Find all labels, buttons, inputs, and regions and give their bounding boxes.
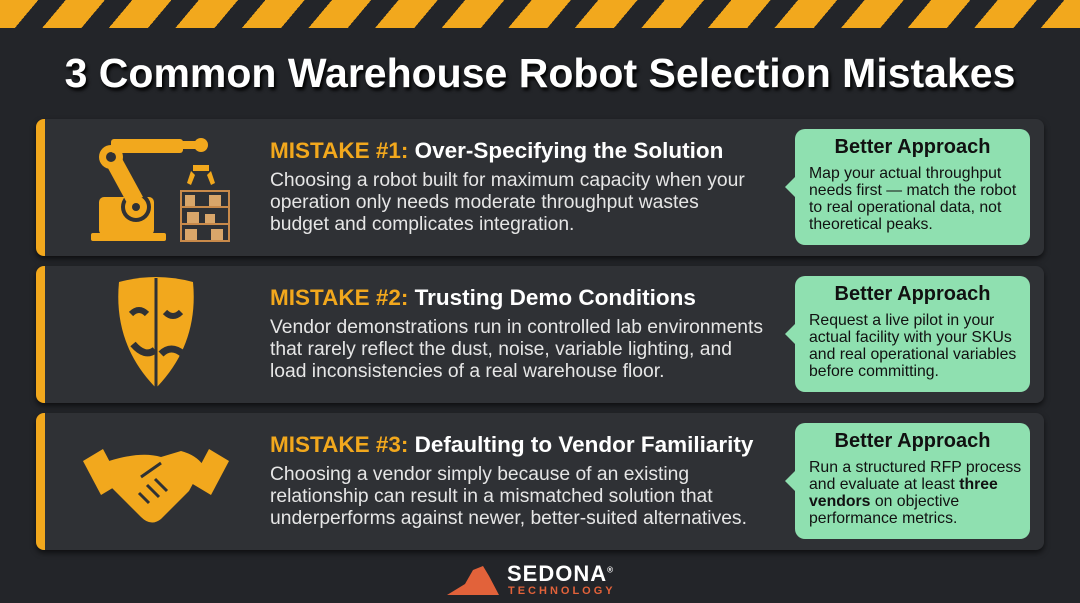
panel: mistake 2: [36, 266, 1044, 403]
callout: better approach: Map your actual throughput: [809, 165, 1001, 182]
callout: better approach: theoretical peaks.: [809, 216, 933, 233]
callout: better approach: [795, 129, 1030, 245]
text: [270, 317, 763, 382]
callout: better approach: [795, 276, 1030, 392]
icon: handshake: [83, 449, 229, 522]
text: relationship can result in a mismatched solution that: [270, 486, 713, 507]
title: 3 Common Warehouse Robot Selection Mistakes: [65, 50, 1015, 96]
hazard stripes: [0, 0, 1080, 28]
logo: TECHNOLOGY: [508, 585, 616, 597]
panel: mistake 3: [36, 413, 1044, 550]
text: Choosing a vendor simply because of an existing: [270, 464, 689, 485]
text: operation only needs moderate throughput wastes: [270, 192, 699, 213]
callout: better approach: and evaluate at least three: [809, 476, 998, 493]
icon: robot arm: [91, 138, 230, 242]
text: Vendor demonstrations run in controlled lab environments: [270, 317, 763, 338]
text: that rarely reflect the dust, noise, variable lighting, and: [270, 339, 732, 360]
logo: SEDONA®: [507, 561, 614, 586]
text: load inconsistencies of a real warehouse floor.: [270, 361, 664, 382]
callout: better approach: to real operational data, not: [809, 199, 1001, 216]
callout: better approach: before committing.: [809, 363, 939, 380]
text: budget and complicates integration.: [270, 214, 574, 235]
text: Choosing a robot built for maximum capacity when your: [270, 170, 745, 191]
callout: better approach: vendors on objective: [809, 493, 959, 510]
heading: MISTAKE #3: Defaulting to Vendor Familiarity: [270, 432, 753, 457]
callout: better approach: needs first — match the robot: [809, 182, 1016, 199]
icon: logo mountain: [447, 566, 499, 595]
text: underperforms against newer, better-suited alternatives.: [270, 508, 747, 529]
callout: better approach: performance metrics.: [809, 510, 957, 527]
icon: theater mask: [118, 277, 194, 386]
callout: better approach: Run a structured RFP process: [809, 459, 1021, 476]
heading: MISTAKE #2: Trusting Demo Conditions: [270, 285, 696, 310]
text: [270, 170, 745, 235]
callout: better approach: Better Approach: [835, 283, 990, 305]
callout: better approach: Better Approach: [835, 136, 990, 158]
callout: better approach: [795, 423, 1030, 539]
callout: better approach: and real operational variables: [809, 346, 1016, 363]
callout: better approach: actual facility with your SKUs: [809, 329, 1012, 346]
callout: better approach: Better Approach: [835, 430, 990, 452]
callout: better approach: Request a live pilot in your: [809, 312, 994, 329]
logo: [447, 561, 616, 597]
text: [270, 464, 747, 529]
heading: MISTAKE #1: Over-Specifying the Solution: [270, 138, 723, 163]
panel: mistake 1: [36, 119, 1044, 256]
